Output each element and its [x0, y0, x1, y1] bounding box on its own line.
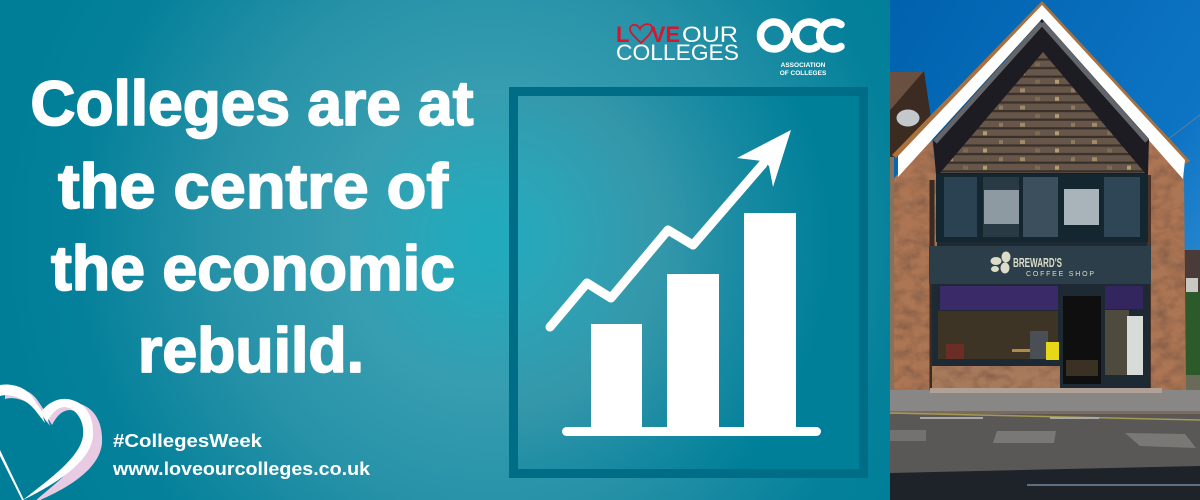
hashtag: #CollegesWeek: [113, 430, 263, 451]
icon: ribbon heart: [0, 385, 102, 500]
logo: Association of Colleges: ASSOCIATION: [781, 62, 826, 69]
logo: Love Our Colleges: L: [616, 22, 629, 47]
logo: Association of Colleges: [760, 22, 841, 77]
gable roof: [892, 1, 1190, 179]
shop sign: COFFEE SHOP: [1026, 271, 1094, 278]
logo: Love Our Colleges: OUR: [682, 22, 738, 47]
neighbouring house with satellite dish: [890, 71, 932, 160]
headline: rebuild.: [138, 316, 364, 386]
logo: Association of Colleges: OF COLLEGES: [780, 70, 827, 77]
headline: [30, 69, 474, 386]
headline: Colleges are at: [30, 69, 474, 139]
road: [890, 413, 1200, 500]
logo: Love Our Colleges: [616, 22, 739, 65]
headline: the economic: [51, 234, 455, 304]
panel: chart frame: [514, 92, 864, 474]
distant house and hedge: [1182, 250, 1200, 391]
pavement: [890, 388, 1200, 414]
shopfront: [932, 284, 1150, 388]
logo: Love Our Colleges: VE: [651, 22, 680, 47]
teal background panel: [0, 0, 890, 500]
logo: Love Our Colleges: COLLEGES: [616, 40, 739, 65]
shop sign: BREWARD'S: [1013, 255, 1062, 270]
headline: the centre of: [58, 152, 449, 222]
upper windows: [936, 174, 1148, 242]
icon: rising arrow: [550, 130, 791, 327]
website address: www.loveourcolleges.co.uk: [112, 458, 371, 479]
stone walls: [890, 136, 1186, 395]
bar chart icon: [562, 213, 821, 436]
icon: red heart in logo: [630, 24, 652, 43]
photo: coffee shop building: [890, 0, 1200, 500]
shop sign: [929, 246, 1151, 284]
